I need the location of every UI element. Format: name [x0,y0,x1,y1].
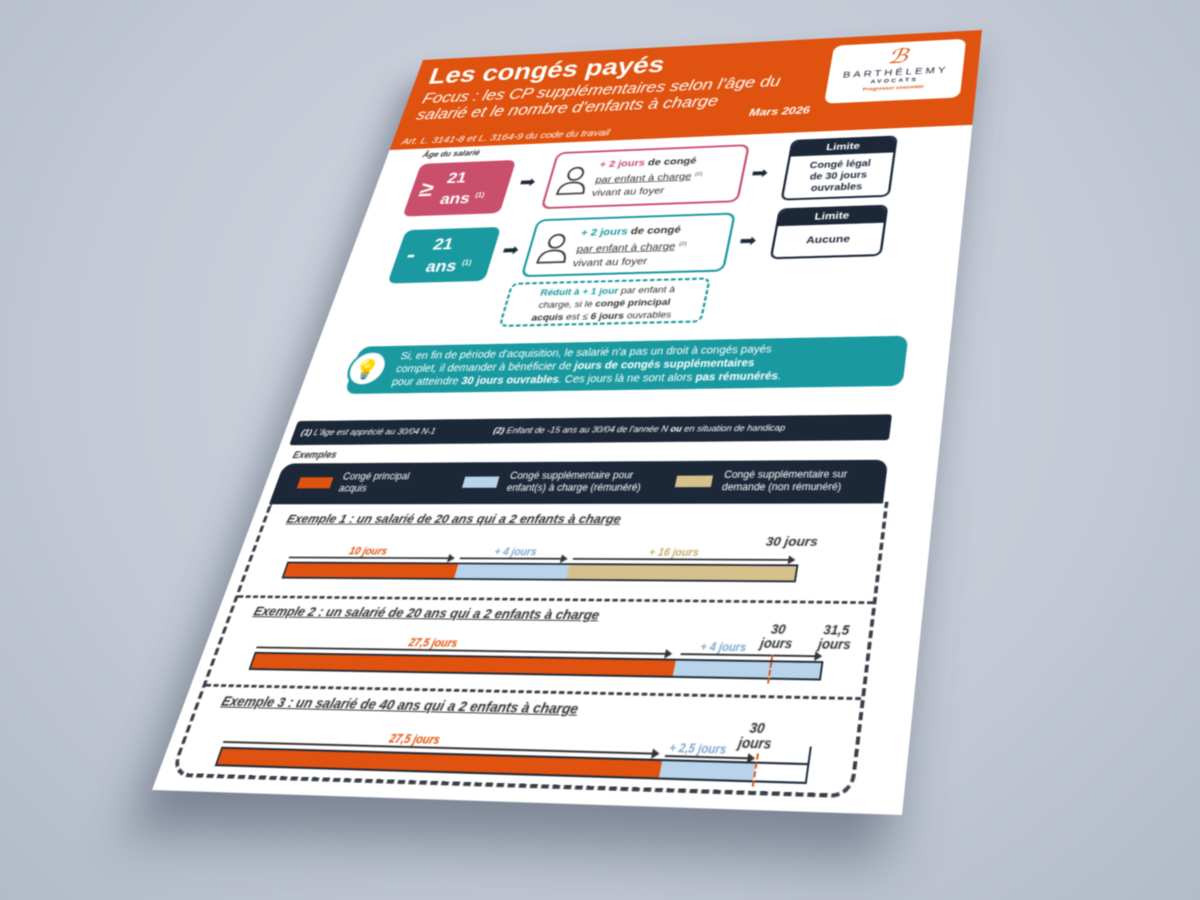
date: Mars 2026 [748,104,811,118]
box: age ≥ 21: 21 [445,170,469,187]
arrow row 2: ➡ [500,240,522,260]
example 2: 27,5 jours [407,636,459,650]
legend header [269,460,888,504]
legal references: Art. L. 3141-8 et L. 3164-9 du code du travail [400,128,611,147]
example 1: 10 jours [348,545,389,557]
logo: ℬ [886,45,909,68]
example 1: + 16 jours [648,546,700,559]
box: +2 days per child (<21) [520,213,736,277]
limit box 1: de 30 jours [809,169,868,182]
callout: teal info [344,336,908,394]
box: +2 days per child (≥21): par enfant à charge (2) [594,171,703,185]
example 1 [280,512,819,584]
example 1: + 4 jours [493,546,538,558]
limit box 2: Limite [814,210,850,222]
legend header: Congé principal [341,471,411,482]
limit box 2: Aucune [805,233,851,246]
example 2: 31,5 [823,622,850,638]
limit box 1: Limite [825,141,861,153]
footnotes bar [289,414,892,445]
icon: person [555,166,586,196]
subtitle: salarié et le nombre d'enfants à charge [414,93,720,123]
example 2 [248,604,852,684]
example 3: 27,5 jours [388,732,442,747]
dashed examples frame [169,502,889,798]
box: +2 days per child (<21): par enfant à charge (2) [575,240,687,255]
example 2: jours [759,635,793,651]
icon: person [535,233,567,264]
legend header: acquis [337,483,369,494]
box: +2 days per child (<21): vivant au foyer [571,255,649,269]
legend header: enfant(s) à charge (rémunéré) [505,482,642,493]
logo: BARTHÉLEMY [842,65,949,80]
example 2: Exemple 2 : un salarié de 20 ans qui a 2 enfants à charge [252,604,601,623]
limit box 1: ouvrables [810,181,863,193]
box: +2 days per child (≥21): + 2 jours de congé [598,155,698,170]
box: +2 days per child (≥21): vivant au foyer [591,185,665,199]
header band [390,30,982,150]
box: age ≥ 21: ans (1) [438,190,485,208]
box: age < 21 [387,227,501,284]
box: age ≥ 21 [402,160,516,217]
dashed note: reduced [498,277,711,327]
example 1: Exemple 1 : un salarié de 20 ans qui a 2 enfants à charge [285,512,623,526]
example 3: Exemple 3 : un salarié de 40 ans qui a 2 enfants à charge [219,694,580,718]
box: age ≥ 21: ≥ [416,177,437,201]
callout: teal info: complet, il demander à bénéficier de jours de congés supplémentaires [395,356,756,374]
icon: lightbulb: 💡 [351,358,383,380]
callout: teal info: pour atteindre 30 jours ouvrables. Ces jours là ne sont alors pas rémunérés. [390,369,782,387]
label: examples: Exemples [291,449,339,460]
arrow row 1: ➡ [517,172,538,191]
box: +2 days per child (≥21) [540,144,750,209]
dashed note: reduced: charge, si le congé principal [537,296,672,310]
example 2: 30 [770,622,787,637]
logo: Progresser ensemble [862,84,924,92]
callout: teal info: Si, en fin de période d'acquisition, le salarié n'a pas un droit à congés payés [399,343,773,361]
limit box 1 [780,135,898,201]
example 3: + 2,5 jours [668,741,728,757]
legend header: Congé supplémentaire sur [723,468,848,480]
icon: lightbulb [342,350,392,387]
title: Les congés payés [425,52,668,89]
logo: AVOCATS [870,76,919,84]
box: age < 21: 21 [431,235,456,254]
example 3: jours [737,735,773,752]
example 2: jours [817,636,852,652]
dashed note: reduced: Réduit à + 1 jour par enfant à [539,284,676,298]
legend header: demande (non rémunéré) [721,481,842,493]
limit box 2 [769,205,889,259]
label: age: Âge du salarié [421,148,481,159]
legend header: Congé supplémentaire pour [509,469,635,481]
page: infographic sheet [152,30,982,815]
arrow row 2 right: ➡ [738,230,758,251]
limit box 1: Congé légal [809,158,872,170]
subtitle [414,73,782,123]
subtitle: Focus : les CP supplémentaires selon l'âge du [420,73,782,107]
example 2: + 4 jours [699,640,747,654]
example 1: 30 jours [765,534,819,549]
example 3: 30 [749,720,766,736]
box: age < 21: ans (1) [423,257,472,276]
example 3 [214,694,850,790]
box: age < 21: - [403,242,420,267]
footnotes bar: (1) L'âge est apprécié au 30/04 N-1 (2) Enfant de -15 ans au 30/04 de l'année N ou en situation de handicap [300,423,786,438]
logo [824,39,966,104]
arrow row 1 right: ➡ [750,163,770,183]
box: +2 days per child (<21): + 2 jours de congé [580,224,682,239]
dashed note: reduced: acquis est ≤ 6 jours ouvrables [530,309,673,323]
